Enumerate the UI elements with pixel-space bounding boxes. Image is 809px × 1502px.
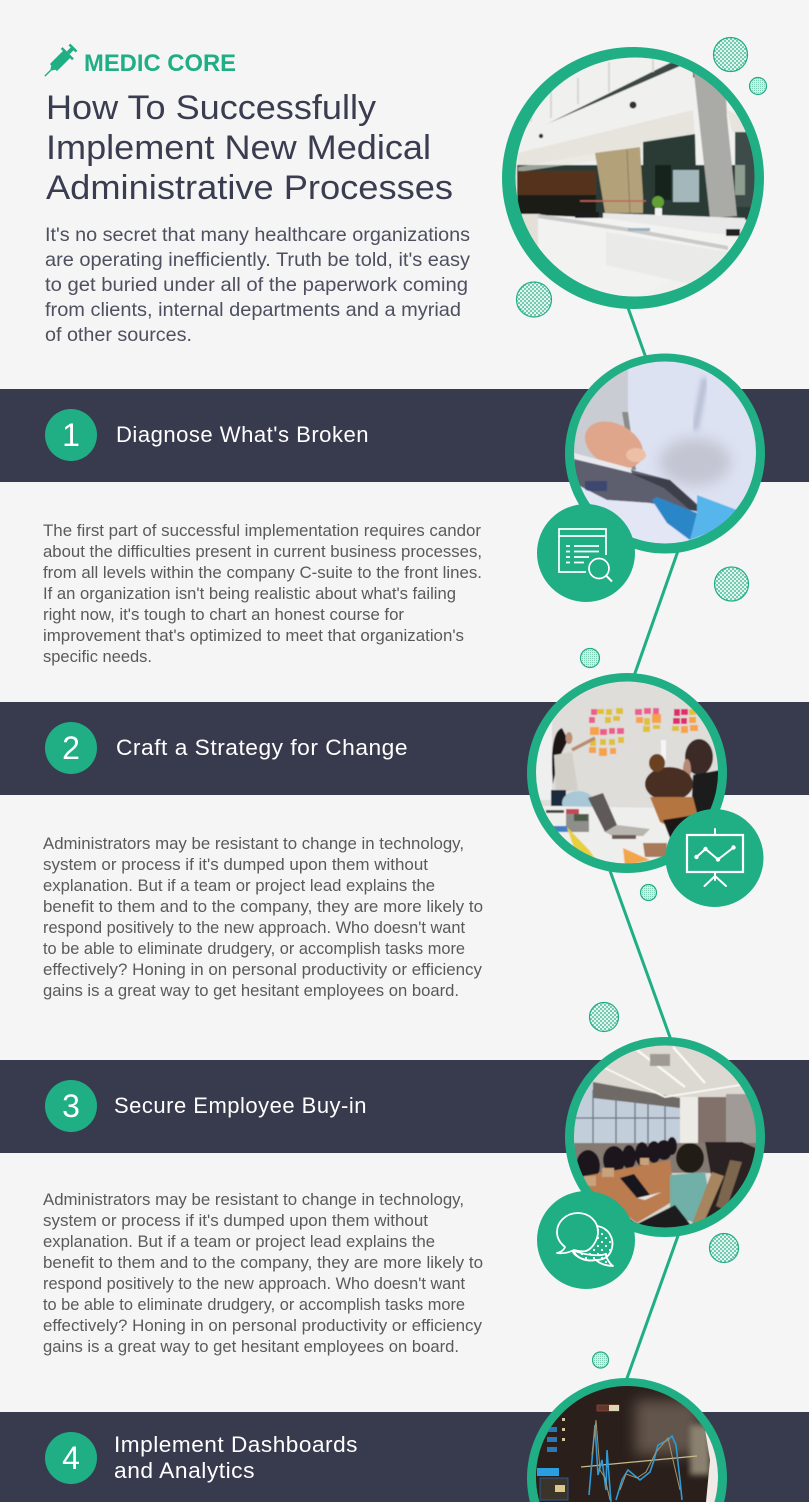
step 2 body text: gains is a great way to get hesitant employees on board. — [43, 982, 459, 1000]
step 1 body text: right now, it's tough to chart an honest course for — [43, 606, 405, 624]
icon: presentation board with line chart — [666, 809, 764, 907]
step 4 heading: Implement Dashboards — [114, 1432, 358, 1457]
step 1 body text: from all levels within the company C-suite to the front lines. — [43, 564, 482, 582]
step 1 body text: specific needs. — [43, 648, 152, 666]
step 3 heading: Secure Employee Buy-in — [114, 1093, 367, 1118]
icon: speech bubbles — [537, 1191, 635, 1289]
title: Implement New Medical — [46, 129, 431, 167]
photo: clipboard and pen — [565, 354, 765, 554]
step 3 body text: effectively? Honing in on personal productivity or efficiency — [43, 1317, 483, 1335]
step 4 number badge: 4 — [62, 1440, 80, 1476]
decorative dotted circles — [516, 38, 766, 1368]
step 4 heading — [114, 1432, 358, 1483]
step 2 body text: to be able to eliminate drudgery, or accomplish tasks more — [43, 940, 465, 958]
intro paragraph: It's no secret that many healthcare organizations — [45, 224, 470, 246]
step 4 number badge — [45, 1432, 97, 1484]
intro paragraph: from clients, internal departments and a myriad — [45, 299, 461, 321]
icon: document with magnifier — [537, 504, 635, 602]
step 3 number badge: 3 — [62, 1088, 80, 1124]
step 1 number badge: 1 — [62, 417, 80, 453]
section band 2 — [0, 702, 809, 795]
intro paragraph: of other sources. — [45, 324, 192, 346]
step 3 body text: respond positively to the new approach. Who doesn't want — [43, 1275, 465, 1293]
step 1 number badge — [45, 409, 97, 461]
step 2 body text: effectively? Honing in on personal productivity or efficiency — [43, 961, 483, 979]
step 1 heading: Diagnose What's Broken — [116, 422, 369, 447]
step 1 body text: about the difficulties present in current business processes, — [43, 543, 482, 561]
title: Administrative Processes — [46, 169, 453, 207]
title: How To Successfully — [46, 89, 376, 127]
step 4 heading: and Analytics — [114, 1458, 255, 1483]
photo: stock chart on screen — [527, 1378, 727, 1502]
hero photo: hospital reception — [502, 47, 764, 309]
section band 1 — [0, 389, 809, 482]
step 2 number badge: 2 — [62, 730, 80, 766]
intro paragraph — [45, 224, 470, 346]
step 2 body text: respond positively to the new approach. Who doesn't want — [43, 919, 465, 937]
connector path between circles — [609, 305, 679, 1381]
step 2 body text: Administrators may be resistant to change in technology, — [43, 835, 464, 853]
step 2 body text: system or process if it's dumped upon them without — [43, 856, 428, 874]
section band 3 — [0, 1060, 809, 1153]
step 3 number badge — [45, 1080, 97, 1132]
photo: team at whiteboard with sticky notes — [527, 673, 727, 873]
step 3 body text: Administrators may be resistant to change in technology, — [43, 1191, 464, 1209]
icon: syringe — [39, 41, 80, 82]
step 3 body text: benefit to them and to the company, they are more likely to — [43, 1254, 483, 1272]
step 3 body text: gains is a great way to get hesitant employees on board. — [43, 1338, 459, 1356]
step 2 body text: benefit to them and to the company, they are more likely to — [43, 898, 483, 916]
section band 4 — [0, 1412, 809, 1502]
step 3 body text: system or process if it's dumped upon them without — [43, 1212, 428, 1230]
step 2 body text — [43, 835, 483, 1000]
step 2 body text: explanation. But if a team or project lead explains the — [43, 877, 435, 895]
step 1 body text: The first part of successful implementation requires candor — [43, 522, 482, 540]
step 3 body text — [43, 1191, 483, 1356]
step 1 body text: If an organization isn't being realistic about what's failing — [43, 585, 456, 603]
step 3 body text: to be able to eliminate drudgery, or accomplish tasks more — [43, 1296, 465, 1314]
step 2 number badge — [45, 722, 97, 774]
step 3 body text: explanation. But if a team or project lead explains the — [43, 1233, 435, 1251]
intro paragraph: to get buried under all of the paperwork coming — [45, 274, 468, 296]
step 1 body text: improvement that's optimized to meet that organization's — [43, 627, 464, 645]
step 1 body text — [43, 522, 482, 666]
title — [46, 89, 453, 207]
intro paragraph: are operating inefficiently. Truth be told, it's easy — [45, 249, 470, 271]
brand: medic core logo — [39, 41, 236, 82]
step 2 heading: Craft a Strategy for Change — [116, 735, 408, 760]
brand: medic core logo: MEDIC CORE — [84, 50, 236, 77]
photo: boardroom meeting — [565, 1037, 765, 1237]
